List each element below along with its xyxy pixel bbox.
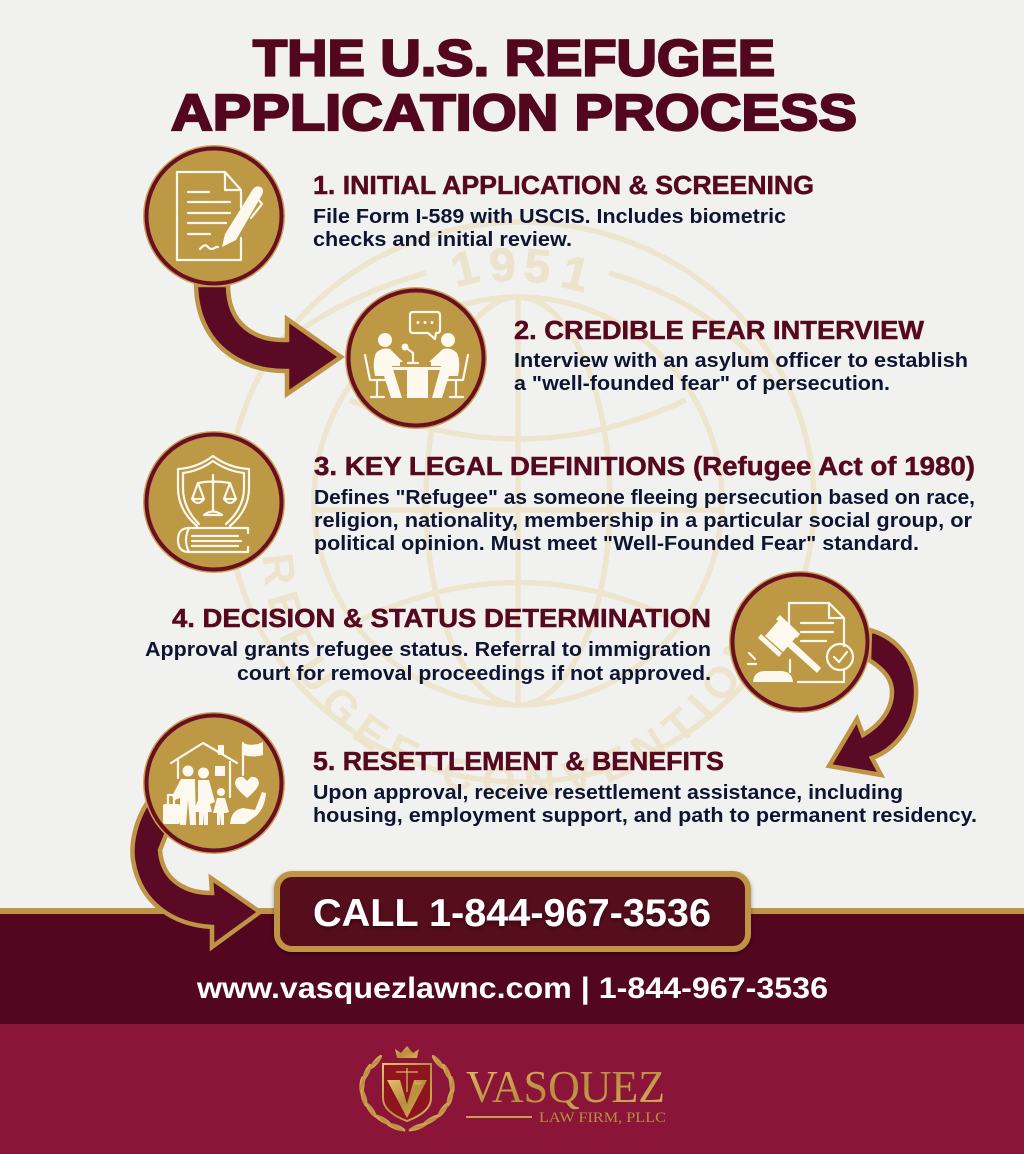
icon: two people at interview table — [345, 287, 487, 429]
description 2: Interview with an asylum officer to establish — [514, 349, 968, 372]
description 2 — [514, 349, 968, 395]
heading 2: 2. CREDIBLE FEAR INTERVIEW — [514, 317, 925, 345]
logo wordmark: LAW FIRM, PLLC — [539, 1110, 666, 1126]
icon: gavel and approved document — [729, 571, 871, 713]
description 1 — [313, 205, 786, 251]
logo emblem — [359, 1046, 455, 1133]
step 5: resettlement and benefits — [143, 712, 977, 854]
description 4 — [145, 638, 711, 685]
footer band — [0, 908, 1024, 1154]
arrow: step 4 to step 5 — [829, 630, 916, 775]
description 3: Defines "Refugee" as someone fleeing persecution based on race, — [314, 486, 975, 509]
call button — [277, 874, 748, 949]
description 3: religion, nationality, membership in a particular social group, or — [314, 509, 972, 532]
description 4: Approval grants refugee status. Referral to immigration — [145, 638, 711, 661]
heading 4: 4. DECISION & STATUS DETERMINATION — [172, 605, 711, 633]
title: THE U.S. REFUGEE — [253, 30, 775, 86]
logo: Vasquez Law Firm — [359, 1046, 666, 1133]
watermark: 1951 refugee convention globe seal: REFUGEE CONVENTION — [262, 554, 736, 798]
icon: document and pen — [143, 145, 285, 287]
description 5: Upon approval, receive resettlement assistance, including — [313, 781, 903, 804]
website and phone: www.vasquezlawnc.com | 1-844-967-3536 — [196, 972, 828, 1005]
description 2: a "well-founded fear" of persecution. — [514, 372, 890, 395]
logo wordmark: VASQUEZ — [466, 1062, 665, 1112]
heading 5: 5. RESETTLEMENT & BENEFITS — [313, 748, 724, 776]
step 2: credible fear interview — [345, 287, 968, 429]
title: APPLICATION PROCESS — [171, 84, 857, 141]
description 5: housing, employment support, and path to permanent residency. — [313, 804, 977, 827]
step 3: key legal definitions — [143, 431, 975, 573]
icon: shield, scales and book — [143, 431, 285, 573]
arrow: step 1 to step 2 — [196, 285, 341, 394]
call button: CALL 1-844-967-3536 — [313, 892, 711, 935]
watermark: 1951 refugee convention globe seal — [234, 219, 817, 798]
description 4: court for removal proceedings if not approved. — [237, 662, 711, 685]
heading 1: 1. INITIAL APPLICATION & SCREENING — [313, 172, 814, 200]
description 1: checks and initial review. — [313, 228, 572, 251]
step 1: initial application and screening — [143, 145, 814, 287]
description 3 — [314, 486, 975, 555]
step 4: decision and status determination — [145, 571, 871, 713]
title — [171, 30, 857, 141]
description 3: political opinion. Must meet "Well-Founded Fear" standard. — [314, 532, 919, 555]
description 1: File Form I-589 with USCIS. Includes biometric — [313, 205, 786, 228]
arrow: step 5 to call button — [132, 796, 260, 947]
icon: family, house, flag, heart and hand — [143, 712, 285, 854]
description 5 — [313, 781, 977, 827]
watermark: 1951 refugee convention globe seal: 1951 — [446, 237, 595, 302]
heading 3: 3. KEY LEGAL DEFINITIONS (Refugee Act of 1980) — [314, 453, 975, 481]
